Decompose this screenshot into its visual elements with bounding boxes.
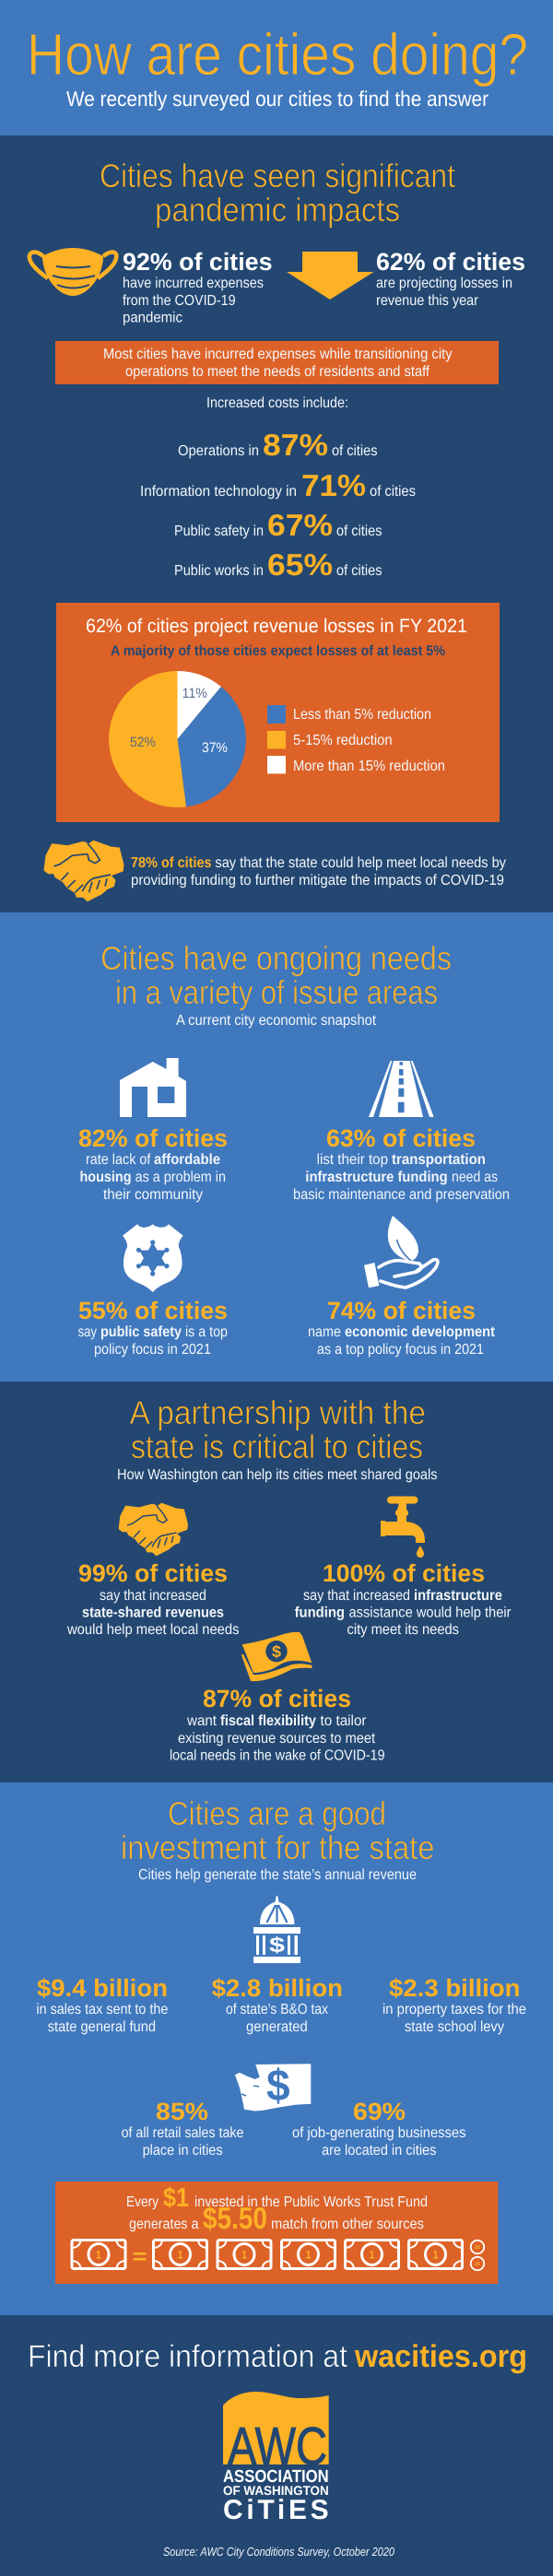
heading: partnership: state is critical to cities bbox=[131, 1428, 423, 1465]
stat: infrastructure funding: funding bbox=[295, 1606, 345, 1620]
stat: 62% of cities: are projecting losses in bbox=[376, 276, 512, 291]
icon: Washington state map: $ bbox=[266, 2062, 290, 2111]
pie chart bbox=[109, 671, 246, 807]
stat: affordable housing: as a problem in bbox=[135, 1170, 226, 1185]
stat: economic development: as a top policy focus in 2021 bbox=[317, 1342, 484, 1358]
stat: fiscal flexibility: want bbox=[186, 1713, 218, 1729]
heading: partnership: A partnership with the bbox=[129, 1394, 426, 1431]
heading: pandemic impacts bbox=[100, 157, 455, 229]
stat: $2.3 billion bbox=[382, 1974, 526, 2035]
pie chart: 11% bbox=[182, 686, 207, 701]
pie chart: 52% bbox=[130, 735, 156, 750]
stat: fiscal flexibility: existing revenue sources to meet bbox=[178, 1731, 375, 1747]
stat: $2.3 billion: $2.3 billion bbox=[389, 1974, 520, 2002]
stat: affordable housing: rate lack of bbox=[86, 1152, 151, 1168]
stat: transportation: list their top bbox=[317, 1152, 388, 1168]
text: 78% of cities bbox=[131, 855, 506, 888]
stat: public safety 67%: 67% bbox=[267, 508, 333, 542]
stat: state-shared revenues: would help meet local needs bbox=[66, 1622, 240, 1638]
stat: 62% of cities: 62% of cities bbox=[376, 248, 525, 276]
icon: road bbox=[369, 1061, 434, 1117]
stat: state-shared revenues: 99% of cities bbox=[78, 1559, 228, 1587]
legend: Less than 5% reduction bbox=[293, 707, 431, 723]
stat: transportation bbox=[293, 1124, 510, 1203]
icon: one dollar bill: 1 bbox=[96, 2249, 101, 2262]
panel: footer bbox=[0, 2315, 553, 2576]
stat: $2.8 billion: generated bbox=[246, 2019, 308, 2035]
logo: AWC: CiTiES bbox=[223, 2495, 329, 2525]
stat: fiscal flexibility: to tailor bbox=[321, 1713, 367, 1729]
stat: fiscal flexibility: fiscal flexibility bbox=[220, 1713, 316, 1729]
stat: $2.8 billion: of state’s B&O tax bbox=[226, 2002, 328, 2017]
text: 78% of cities: providing funding to further mitigate the impacts of COVID-19 bbox=[131, 873, 504, 888]
heading: ongoing needs: Cities have ongoing needs bbox=[100, 939, 452, 977]
panel: ongoing needs bbox=[0, 912, 553, 1382]
heading: pandemic impacts: pandemic impacts bbox=[155, 191, 400, 229]
panel: public works trust fund bbox=[55, 2182, 498, 2284]
logo: AWC: OF WASHINGTON bbox=[223, 2483, 329, 2498]
call to action: wacities.org bbox=[354, 2339, 527, 2374]
stat: information technology 71% bbox=[140, 468, 416, 502]
source note: Source: AWC City Conditions Survey, October 2020 bbox=[163, 2545, 395, 2558]
stat: $9.4 billion: $9.4 billion bbox=[37, 1974, 168, 2002]
stat: state-shared revenues: state-shared revenues bbox=[82, 1606, 224, 1620]
stat: affordable housing: housing bbox=[79, 1170, 131, 1185]
stat: public works 65%: 65% bbox=[267, 547, 333, 582]
stat: operations 87%: 87% bbox=[263, 428, 328, 462]
stat: public safety 67% bbox=[174, 508, 382, 542]
stat: 92% of cities: have incurred expenses bbox=[123, 276, 264, 291]
stat: 85%: 85% bbox=[156, 2098, 208, 2125]
stat: transportation: transportation bbox=[392, 1152, 486, 1168]
heading: partnership bbox=[129, 1394, 426, 1465]
stat: $2.3 billion: in property taxes for the bbox=[382, 2002, 526, 2017]
icons: five dollar bills bbox=[153, 2240, 463, 2269]
stat: transportation: 63% of cities bbox=[326, 1124, 476, 1152]
stat: economic development: name bbox=[308, 1324, 341, 1340]
stat: public safety: is a top bbox=[185, 1324, 228, 1340]
stat: operations 87% bbox=[178, 428, 378, 462]
icon: face mask bbox=[29, 248, 116, 296]
stat: 92% of cities: pandemic bbox=[123, 310, 182, 326]
stat: public safety bbox=[78, 1297, 228, 1358]
panel: header bbox=[0, 0, 553, 135]
icons: five dollar bills: 1 bbox=[369, 2249, 375, 2262]
icon: down arrow bbox=[287, 252, 374, 300]
icon: handshake bbox=[44, 841, 124, 901]
stat: 69%: of job-generating businesses bbox=[292, 2125, 466, 2141]
text: every $1 invested: invested in the Public Works Trust Fund bbox=[194, 2194, 428, 2210]
chart title: 62% of cities project revenue losses in FY 2021 bbox=[86, 616, 467, 637]
icon: money bbox=[241, 1632, 312, 1681]
icon: money: $ bbox=[272, 1642, 281, 1661]
legend bbox=[267, 705, 445, 774]
heading: good investment bbox=[121, 1794, 435, 1866]
icon: one dollar bill bbox=[72, 2240, 125, 2269]
text: generates a $5.50 match: generates a bbox=[129, 2217, 199, 2232]
callout: expenses: Most cities have incurred expenses while transitioning city bbox=[103, 347, 453, 362]
icon: faucet bbox=[381, 1497, 425, 1558]
icon: capitol: $ bbox=[269, 1933, 285, 1957]
icons: five dollar bills: 1 bbox=[241, 2249, 247, 2262]
icon: equals sign bbox=[134, 2253, 146, 2261]
stat: information technology 71%: Information technology in bbox=[140, 484, 297, 500]
stat: transportation: basic maintenance and preservation bbox=[293, 1187, 510, 1203]
stat: public safety: policy focus in 2021 bbox=[94, 1342, 211, 1358]
stat: 69%: are located in cities bbox=[322, 2143, 436, 2158]
logo: AWC: AWC bbox=[228, 2417, 327, 2476]
icons: five dollar bills: 1 bbox=[177, 2249, 183, 2262]
subheading: A current city economic snapshot bbox=[176, 1013, 377, 1029]
icon: Washington state map bbox=[235, 2062, 311, 2111]
stat: $2.3 billion: state school levy bbox=[405, 2019, 504, 2035]
icons: quarters: 25 bbox=[475, 2262, 480, 2267]
icon: leaf in hand bbox=[364, 1216, 438, 1288]
heading: ongoing needs bbox=[100, 939, 452, 1011]
heading: pandemic impacts: Cities have seen significant bbox=[100, 157, 455, 194]
stat: infrastructure funding: 100% of cities bbox=[323, 1559, 485, 1587]
panel: state partnership bbox=[0, 1382, 553, 1782]
icons: five dollar bills: 1 bbox=[433, 2249, 439, 2262]
stat: $9.4 billion bbox=[36, 1974, 168, 2035]
heading: good investment: Cities are a good bbox=[168, 1794, 386, 1832]
panel: good investment bbox=[0, 1782, 553, 2315]
stat: economic development bbox=[308, 1297, 496, 1358]
stat: $2.8 billion bbox=[212, 1974, 343, 2035]
stat: transportation: infrastructure funding bbox=[305, 1170, 448, 1185]
stat: infrastructure funding: assistance would help their bbox=[348, 1606, 512, 1620]
call to action bbox=[28, 2339, 527, 2374]
stat: transportation: need as bbox=[452, 1170, 498, 1185]
stat: public works 65%: of cities bbox=[336, 563, 382, 579]
stat: 62% of cities bbox=[376, 248, 525, 309]
stat: public works 65% bbox=[174, 547, 382, 582]
logo: AWC bbox=[223, 2392, 329, 2525]
icons: five dollar bills: 1 bbox=[306, 2249, 312, 2262]
stat: 69%: 69% bbox=[353, 2098, 406, 2125]
icons: quarters bbox=[471, 2241, 484, 2270]
text: generates a $5.50 match bbox=[129, 2201, 424, 2235]
stat: fiscal flexibility: 87% of cities bbox=[203, 1685, 351, 1712]
stat: economic development: economic development bbox=[345, 1324, 496, 1340]
stat: 85%: of all retail sales take bbox=[122, 2125, 243, 2141]
stat: public safety: say bbox=[78, 1324, 97, 1340]
text: generates a $5.50 match: match from other sources bbox=[271, 2217, 424, 2232]
legend: More than 15% reduction bbox=[293, 759, 445, 774]
stat: $2.8 billion: $2.8 billion bbox=[212, 1974, 343, 2002]
callout: expenses bbox=[55, 341, 499, 384]
stat: public safety: 55% of cities bbox=[78, 1297, 228, 1324]
text: every $1 invested bbox=[126, 2183, 428, 2213]
stat: operations 87%: of cities bbox=[332, 443, 378, 459]
stat: fiscal flexibility: local needs in the wake of COVID-19 bbox=[170, 1747, 385, 1764]
stat: information technology 71%: of cities bbox=[370, 484, 416, 500]
icon: handshake bbox=[119, 1503, 188, 1556]
subtitle: We recently surveyed our cities to find the answer bbox=[66, 87, 488, 111]
subheading: Cities help generate the state’s annual revenue bbox=[138, 1867, 417, 1883]
stat: information technology 71%: 71% bbox=[301, 468, 366, 502]
icon: house bbox=[120, 1058, 186, 1117]
panel: revenue losses chart bbox=[56, 603, 500, 822]
legend: 5-15% reduction bbox=[293, 733, 393, 748]
text: 78% of cities: say that the state could help meet local needs by bbox=[215, 855, 506, 871]
stat: infrastructure funding bbox=[295, 1559, 512, 1638]
pie chart: 37% bbox=[202, 740, 228, 756]
stat: state-shared revenues: say that increased bbox=[100, 1588, 206, 1604]
stat: public safety: public safety bbox=[100, 1324, 182, 1340]
stat: operations 87%: Operations in bbox=[178, 443, 259, 459]
stat: $9.4 billion: in sales tax sent to the bbox=[36, 2002, 168, 2017]
chart subtitle: A majority of those cities expect losses of at least 5% bbox=[111, 643, 445, 659]
icons: quarters: 25 bbox=[475, 2245, 480, 2251]
heading: ongoing needs: in a variety of issue areas bbox=[115, 973, 438, 1011]
subheading: How Washington can help its cities meet shared goals bbox=[117, 1467, 437, 1483]
stat: affordable housing: affordable bbox=[154, 1152, 220, 1168]
stat: 92% of cities: from the COVID-19 bbox=[123, 293, 236, 309]
icon: police badge bbox=[123, 1224, 183, 1292]
stat: public works 65%: Public works in bbox=[174, 563, 264, 579]
stat: economic development: 74% of cities bbox=[327, 1297, 476, 1324]
stat: 92% of cities: 92% of cities bbox=[123, 248, 273, 276]
text: 78% of cities: 78% of cities bbox=[131, 855, 212, 871]
stat: infrastructure funding: infrastructure bbox=[414, 1588, 502, 1604]
panel: pandemic impacts bbox=[0, 135, 553, 912]
icon: capitol bbox=[253, 1895, 300, 1963]
stat: 62% of cities: revenue this year bbox=[376, 293, 479, 309]
call to action: Find more information at bbox=[28, 2339, 348, 2374]
stat: public safety 67%: of cities bbox=[336, 523, 382, 539]
text: generates a $5.50 match: $5.50 bbox=[203, 2201, 267, 2235]
stat: public safety 67%: Public safety in bbox=[174, 523, 264, 539]
stat: $9.4 billion: state general fund bbox=[48, 2019, 156, 2035]
text: increased costs intro: Increased costs include: bbox=[206, 395, 348, 411]
stat: 69% bbox=[292, 2098, 466, 2158]
stat: 85% bbox=[122, 2098, 243, 2158]
stat: infrastructure funding: city meet its needs bbox=[347, 1622, 459, 1638]
text: every $1 invested: Every bbox=[126, 2194, 159, 2210]
stat: affordable housing: their community bbox=[103, 1187, 203, 1203]
stat: 85%: place in cities bbox=[143, 2143, 223, 2158]
stat: infrastructure funding: say that increased bbox=[303, 1588, 410, 1604]
callout: expenses: operations to meet the needs of residents and staff bbox=[125, 364, 430, 380]
stat: affordable housing: 82% of cities bbox=[78, 1124, 228, 1152]
heading: good investment: investment for the state bbox=[121, 1829, 435, 1866]
stat: 92% of cities bbox=[123, 248, 273, 326]
stat: affordable housing bbox=[78, 1124, 228, 1203]
logo: AWC: ASSOCIATION bbox=[223, 2467, 329, 2487]
stat: fiscal flexibility bbox=[170, 1685, 385, 1764]
stat: state-shared revenues bbox=[66, 1559, 240, 1638]
text: every $1 invested: $1 bbox=[163, 2183, 189, 2213]
